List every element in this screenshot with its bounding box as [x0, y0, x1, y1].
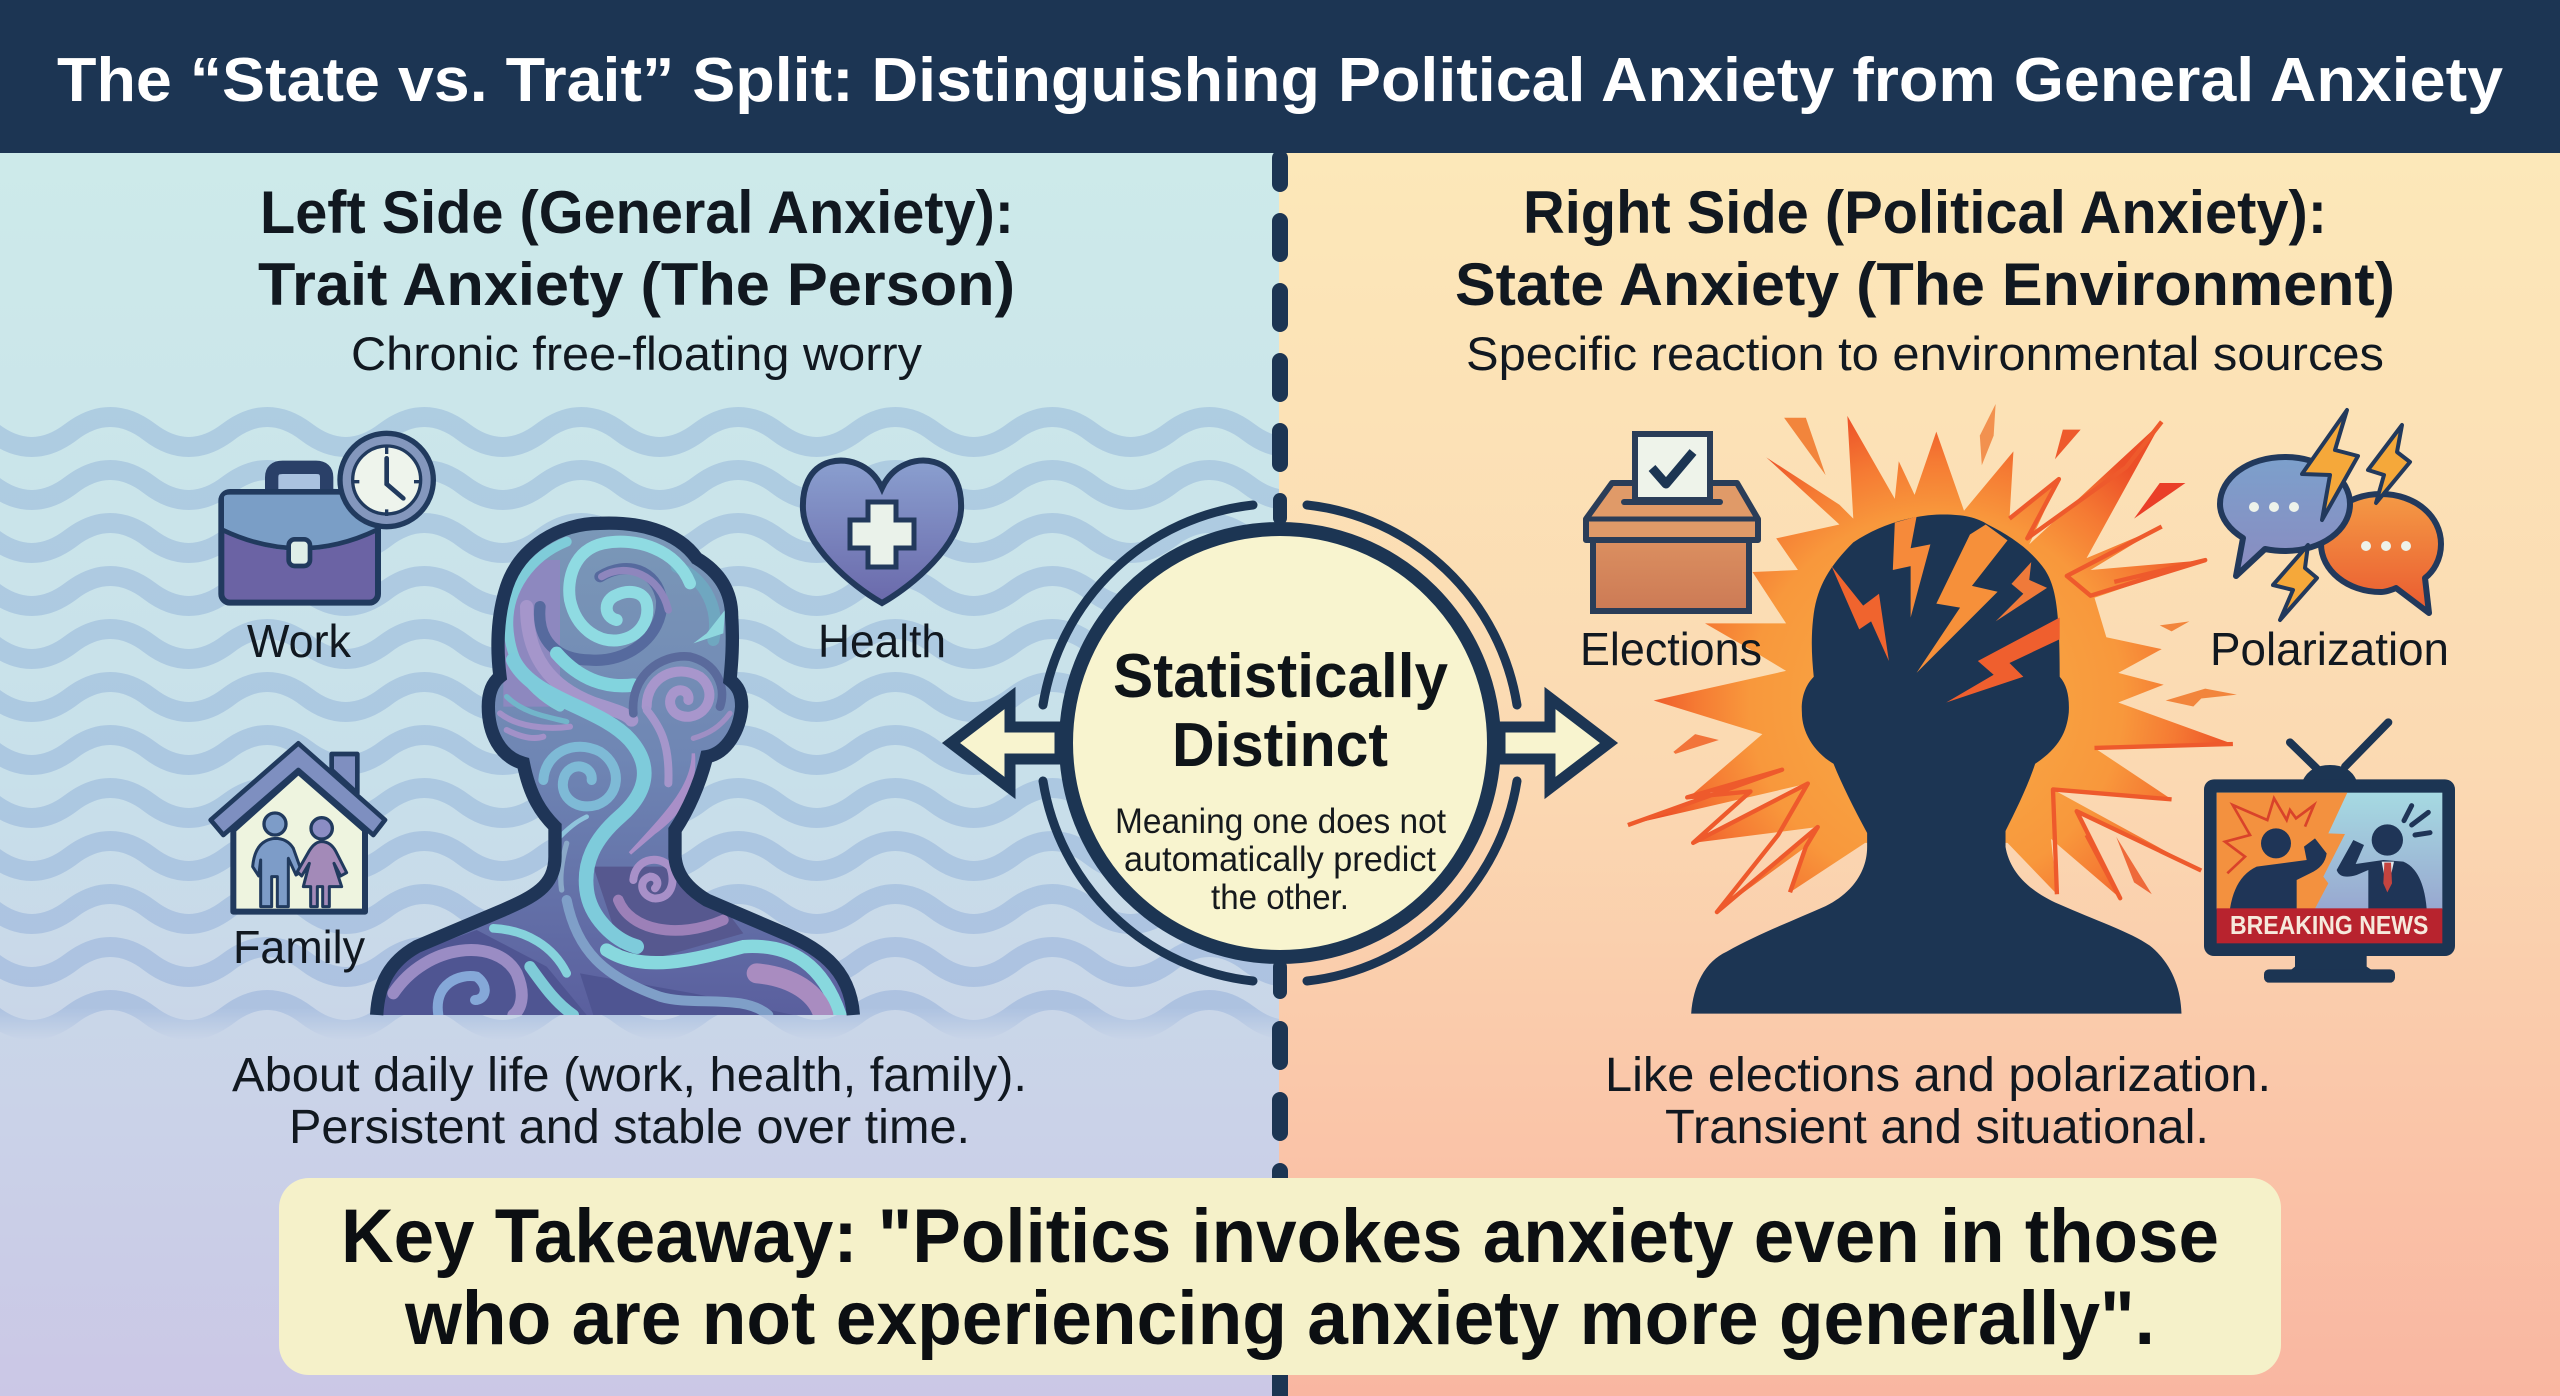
bottom text right: Like elections and polarization.	[1605, 1049, 2271, 1102]
left heading: Left Side (General Anxiety):	[260, 179, 1014, 246]
bottom text left	[232, 1049, 1027, 1154]
title: The “State vs. Trait” Split: Distinguishing Political Anxiety from General Anxiety	[57, 46, 2504, 115]
text: meaning: the other.	[1211, 878, 1349, 917]
label: Work: Work	[247, 615, 352, 667]
arrow left	[951, 698, 1060, 788]
icon: clashing speech bubbles (Polarization)	[2220, 410, 2441, 620]
text: statistically distinct: Statistically	[1113, 642, 1448, 711]
bottom text left: Persistent and stable over time.	[289, 1101, 970, 1154]
left heading: Trait Anxiety (The Person)	[258, 251, 1015, 318]
label: Polarization: Polarization	[2210, 623, 2449, 675]
key takeaway box: Key Takeaway: "Politics invokes anxiety even in those	[341, 1194, 2219, 1279]
icon: house with family	[211, 743, 385, 912]
label: Family: Family	[233, 921, 365, 973]
bottom text left: About daily life (work, health, family).	[232, 1049, 1027, 1102]
center: statistically distinct circle with arrows: Distinct	[1172, 711, 1388, 780]
right heading: Right Side (Political Anxiety):	[1523, 179, 2327, 246]
label: Health: Health	[818, 615, 946, 667]
text: meaning: automatically predict	[1124, 840, 1436, 879]
panel: right background	[1279, 150, 2560, 1396]
icon: heart with cross (Health)	[803, 461, 961, 603]
panel: left background	[0, 150, 1279, 1396]
key takeaway box: who are not experiencing anxiety more generally".	[404, 1276, 2155, 1361]
label: Elections: Elections	[1580, 623, 1762, 675]
bottom text right	[1605, 1049, 2271, 1154]
right heading: State Anxiety (The Environment)	[1455, 251, 2395, 318]
divider dashes	[1272, 150, 1288, 1396]
text: meaning: Meaning one does not	[1115, 802, 1446, 841]
figure: burst behind head	[1628, 404, 2237, 912]
center: statistically distinct circle with arrows	[951, 493, 1609, 999]
right heading: Specific reaction to environmental sources	[1466, 327, 2384, 380]
left heading	[258, 179, 1015, 380]
header banner	[0, 0, 2560, 153]
icon: briefcase and clock (Work)	[221, 433, 433, 603]
icon: TV breaking news	[2204, 722, 2455, 983]
bottom text right: Transient and situational.	[1665, 1101, 2209, 1154]
icon: ballot box (Elections)	[1586, 434, 1758, 611]
right heading	[1455, 179, 2395, 380]
arrow right	[1500, 698, 1609, 788]
key takeaway box	[279, 1178, 2281, 1375]
icon: TV breaking news: BREAKING NEWS	[2230, 910, 2428, 940]
left heading: Chronic free-floating worry	[351, 327, 923, 380]
text: meaning	[1115, 802, 1446, 917]
figure: dark head silhouette with lightning	[1691, 515, 2181, 1014]
figure: swirling head (general anxiety)	[360, 500, 880, 1015]
